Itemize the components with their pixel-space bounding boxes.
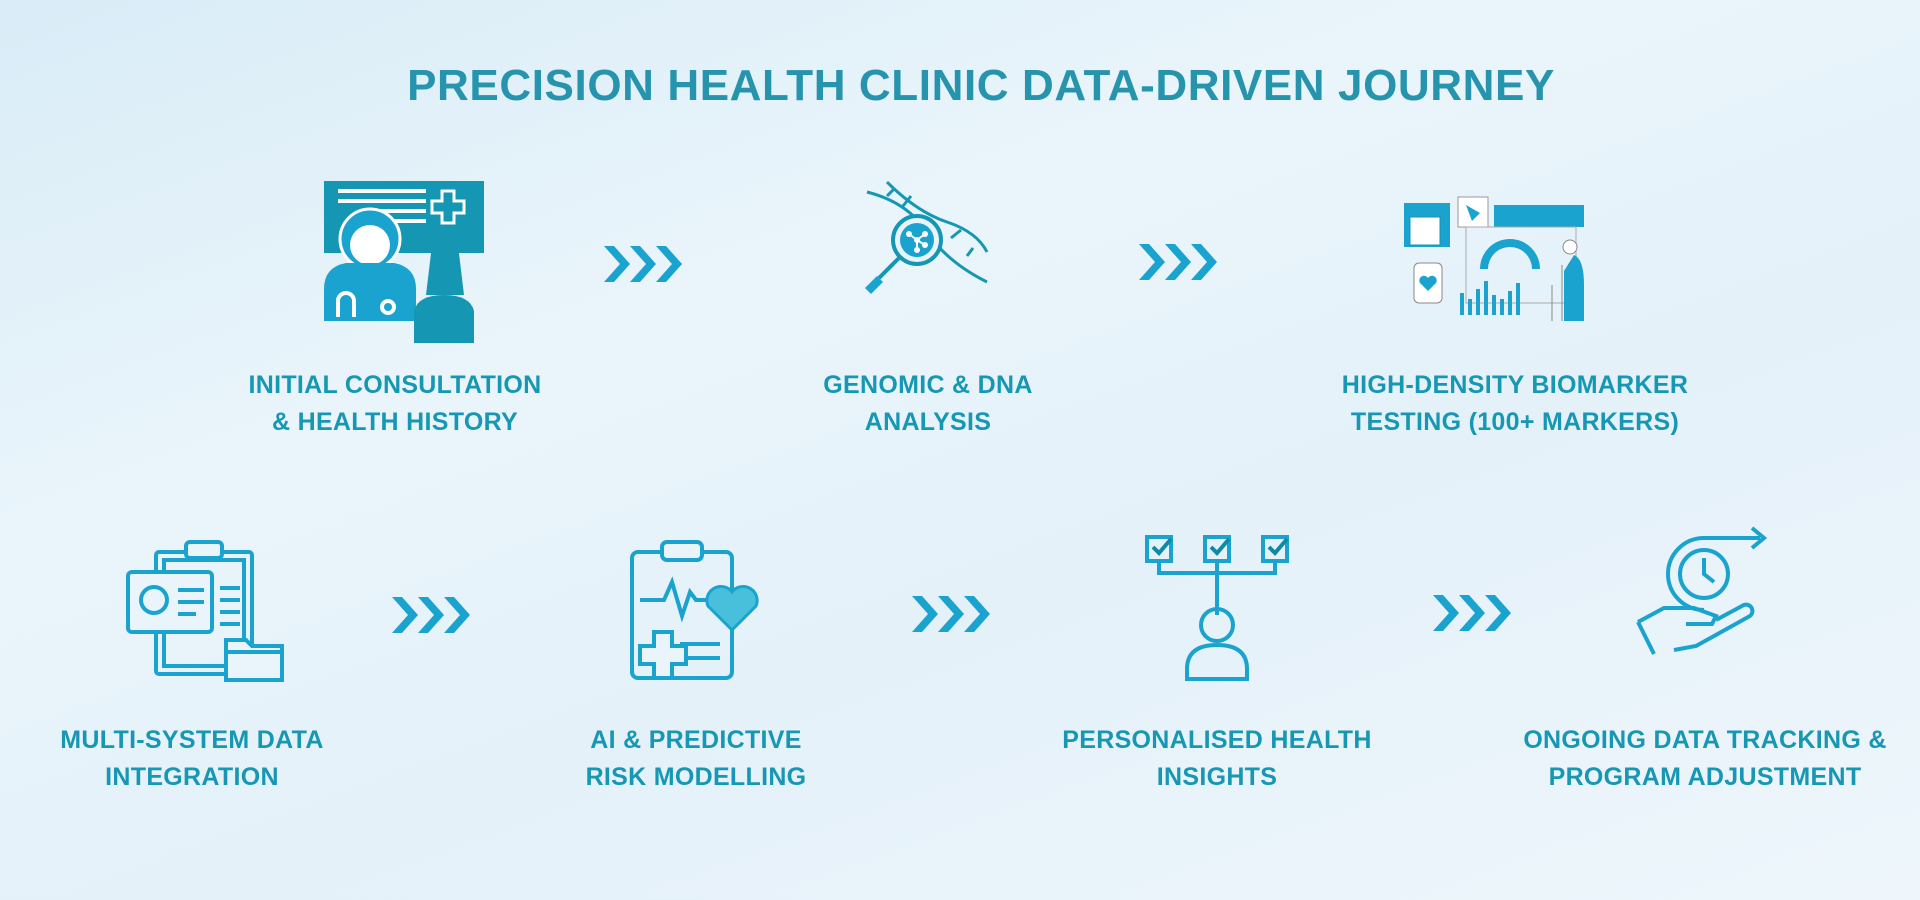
arrow 3: [392, 597, 470, 633]
label: genomic: GENOMIC & DNA: [823, 371, 1033, 399]
label: biomarker: HIGH-DENSITY BIOMARKER: [1342, 371, 1688, 399]
icon: AI risk modelling: [630, 540, 759, 680]
label: ongoing: [1523, 726, 1887, 791]
label: genomic: ANALYSIS: [865, 408, 991, 436]
label: AI: RISK MODELLING: [586, 763, 806, 791]
title: PRECISION HEALTH CLINIC DATA-DRIVEN JOURNEY: [407, 61, 1555, 110]
icon: ongoing tracking: [1636, 526, 1767, 655]
label: biomarker: TESTING (100+ MARKERS): [1351, 408, 1679, 436]
arrow 2: [1139, 244, 1217, 280]
arrow 1: [604, 246, 682, 282]
label: genomic: [823, 371, 1033, 436]
label: data integration: MULTI-SYSTEM DATA: [60, 726, 324, 754]
label: insights: INSIGHTS: [1157, 763, 1277, 791]
arrow 5: [1433, 595, 1511, 631]
label: insights: PERSONALISED HEALTH: [1062, 726, 1372, 754]
icon: DNA analysis: [865, 181, 988, 294]
label: data integration: INTEGRATION: [105, 763, 279, 791]
label: data integration: [60, 726, 324, 791]
label: ongoing: ONGOING DATA TRACKING &: [1523, 726, 1887, 754]
label: ongoing: PROGRAM ADJUSTMENT: [1549, 763, 1861, 791]
label: AI: AI & PREDICTIVE: [590, 726, 802, 754]
icon: biomarker dashboard: [1404, 196, 1584, 321]
arrow 4: [912, 596, 990, 632]
label: initial consultation: & HEALTH HISTORY: [272, 408, 518, 436]
label: biomarker: [1342, 371, 1688, 436]
label: initial consultation: [248, 371, 542, 436]
icon: personalised insights: [1145, 535, 1289, 681]
label: initial consultation: INITIAL CONSULTATION: [248, 371, 542, 399]
icon: data integration: [126, 540, 284, 682]
label: AI: [586, 726, 806, 791]
icon: doctor consultation: [324, 181, 484, 343]
label: insights: [1062, 726, 1372, 791]
